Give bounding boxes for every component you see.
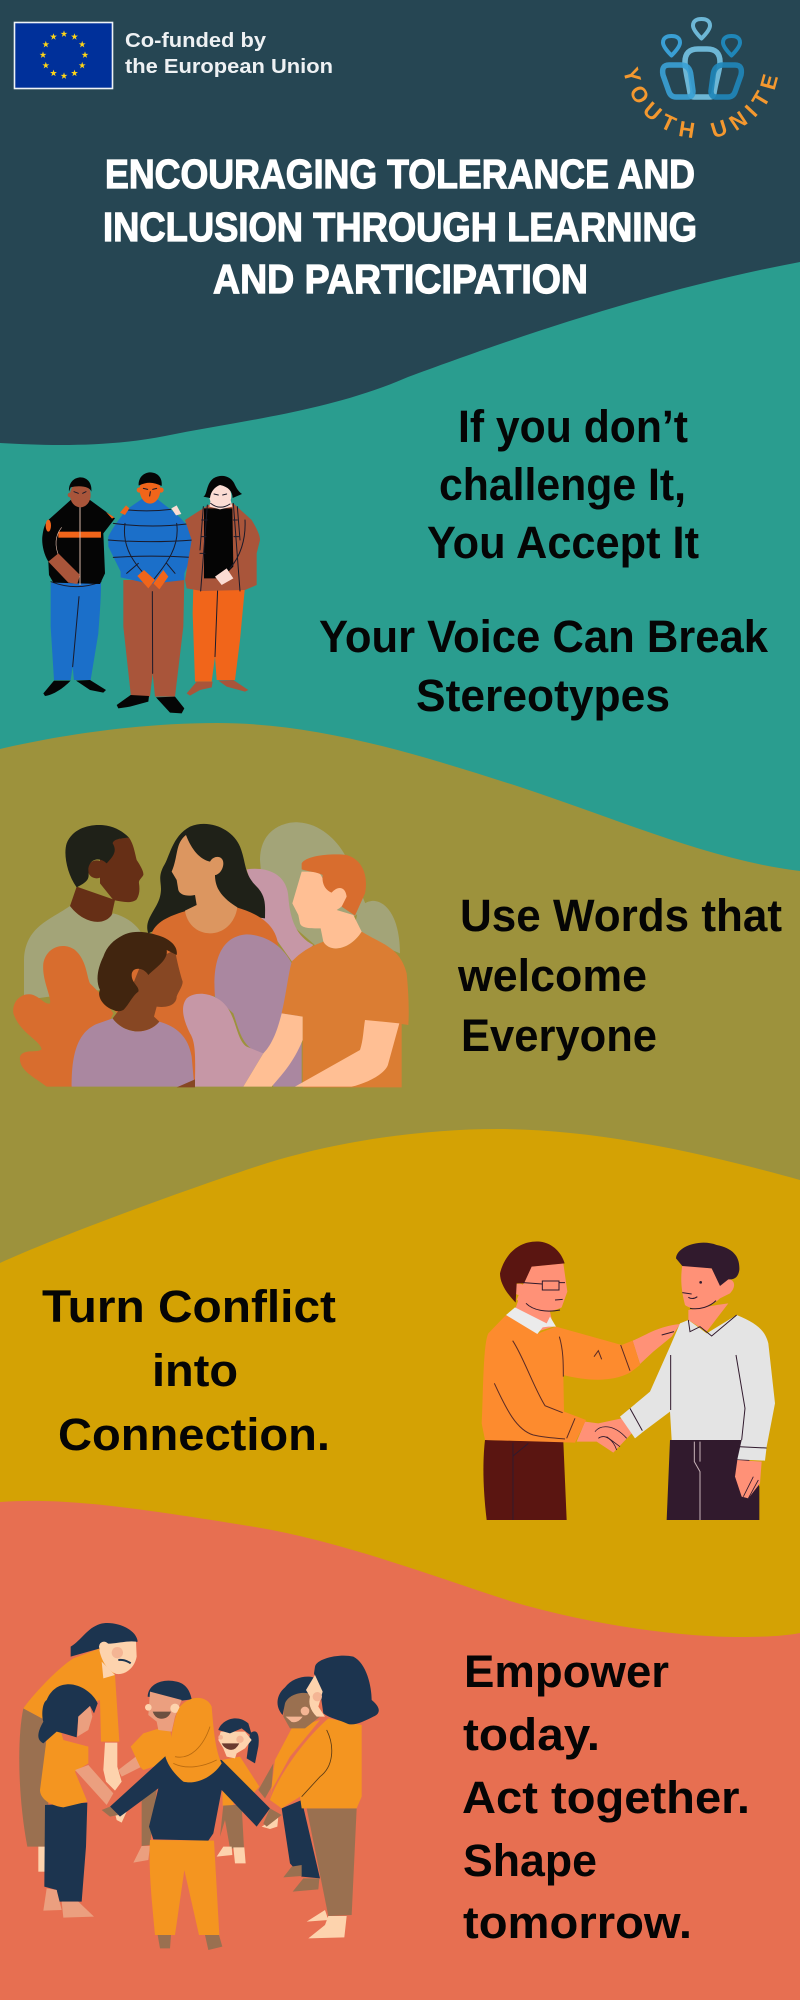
person: right man in white shirt	[595, 1243, 775, 1520]
person: left man in orange sweater	[482, 1242, 680, 1520]
title: ENCOURAGING TOLERANCE AND	[105, 151, 695, 197]
person: woman with short hair at right	[270, 1656, 379, 1938]
person: girl with ponytail	[217, 1718, 259, 1863]
foliage: purple and pink leaves	[183, 934, 302, 1087]
text: conflict message: Turn Conflict	[42, 1281, 336, 1332]
text: challenge message: You Accept It	[427, 517, 699, 568]
background foliage	[247, 822, 400, 963]
icon: EU flag	[14, 22, 112, 88]
text: empower message: Act together.	[462, 1772, 750, 1823]
person: small girl at front left	[38, 1684, 113, 1918]
text: voice message: Stereotypes	[416, 670, 670, 721]
text: co-funded by the European Union: Co-funded by	[125, 30, 267, 52]
text: empower message: tomorrow.	[463, 1897, 692, 1948]
person: boy in centre	[118, 1681, 192, 1863]
person: left man	[42, 477, 115, 696]
text: welcoming words message: Use Words that	[460, 890, 782, 941]
text: co-funded by the European Union	[125, 30, 333, 78]
panel: coral wave section	[0, 1501, 800, 2000]
text: conflict message: into	[152, 1345, 238, 1396]
title: AND PARTICIPATION	[213, 256, 588, 302]
person: man in sage shirt	[24, 825, 143, 1000]
illustration: diverse group of four people	[13, 822, 409, 1087]
person: red-haired man	[243, 854, 409, 1087]
person: middle man	[108, 472, 194, 713]
text: welcoming words message: Everyone	[461, 1010, 657, 1061]
person: child	[72, 932, 195, 1087]
illustration: group of people joining hands in a circle	[19, 1623, 379, 1950]
text: challenge message: challenge It,	[439, 459, 686, 510]
text: empower message: Empower	[464, 1646, 669, 1697]
title	[103, 151, 697, 302]
icon: Youth Unite logo	[624, 17, 778, 138]
title: INCLUSION THROUGH LEARNING	[103, 204, 697, 250]
panel: gold wave section	[0, 1129, 800, 2000]
person: dark-skinned figure at right	[258, 1677, 320, 1892]
text: conflict message	[42, 1281, 336, 1460]
text: welcoming words message: welcome	[457, 950, 647, 1001]
panel: olive wave section	[0, 723, 800, 2000]
text: challenge message	[427, 401, 699, 568]
text: voice message	[319, 611, 769, 721]
text: empower message: Shape	[463, 1835, 597, 1886]
text: welcoming words message	[457, 890, 782, 1061]
foliage: orange leaf	[13, 946, 113, 1087]
illustration: three people standing	[42, 472, 260, 713]
text: empower message: today.	[463, 1709, 600, 1760]
person: figure in hijab seen from behind	[102, 1698, 282, 1950]
text: voice message: Your Voice Can Break	[319, 611, 769, 662]
text: co-funded by the European Union: the European Union	[125, 56, 333, 78]
person: tall woman at back left	[19, 1623, 138, 1872]
illustration: two men shaking hands	[482, 1242, 775, 1520]
icon: Youth Unite logo: YOUTH UNITE	[624, 66, 778, 138]
text: empower message	[462, 1646, 750, 1948]
text: challenge message: If you don’t	[458, 401, 688, 452]
person: right woman	[185, 476, 260, 696]
person: woman with long hair	[100, 824, 278, 1087]
text: conflict message: Connection.	[58, 1409, 330, 1460]
